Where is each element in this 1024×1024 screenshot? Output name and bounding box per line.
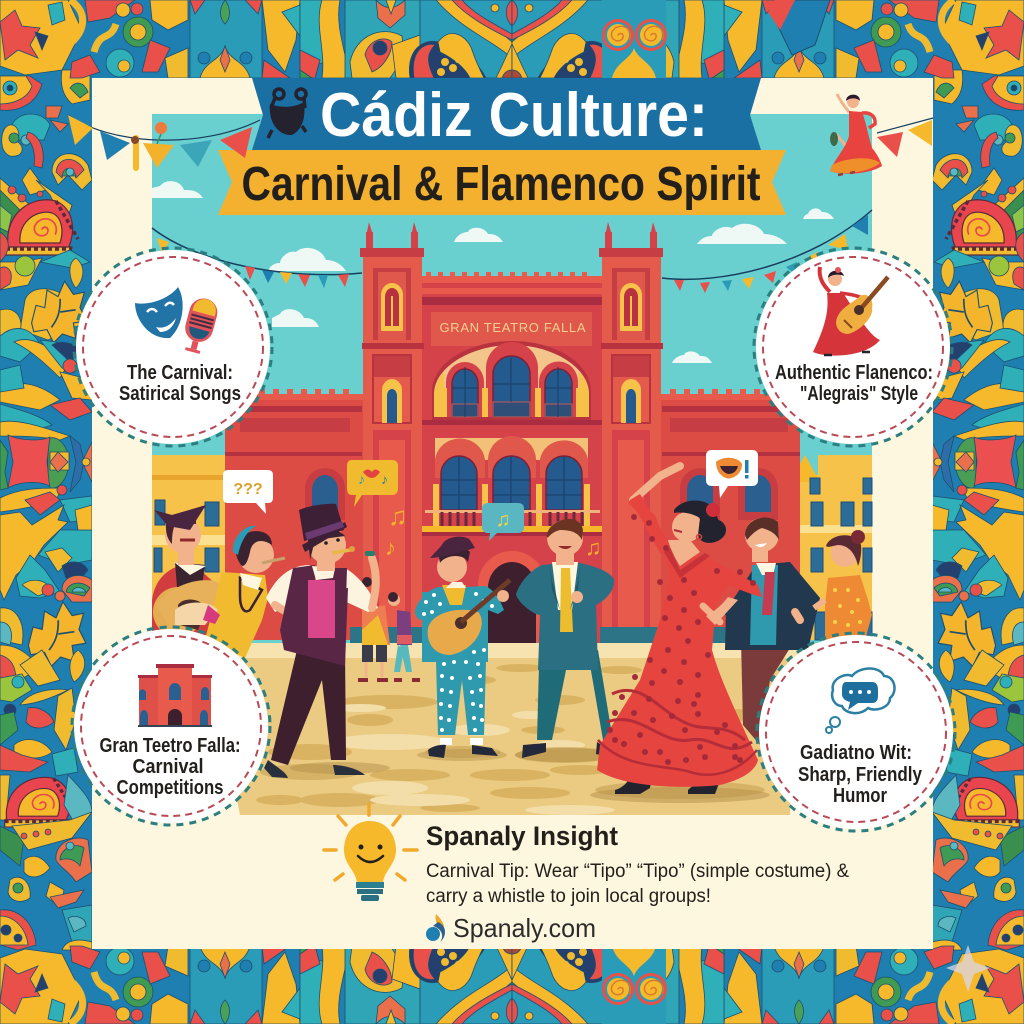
panel: The Carnival circle	[74, 248, 272, 446]
text block: Spanaly Insight: carry a whistle to join local groups!	[426, 886, 711, 907]
building: Gran Teatro Falla: GRAN TEATRO FALLA	[440, 320, 586, 335]
character: flamenco dancer	[590, 466, 770, 803]
title banner: yellow: Carnival & Flamenco Spirit	[242, 158, 761, 211]
label: Gadiatno Wit:	[800, 742, 912, 764]
side wings	[225, 400, 365, 640]
label	[798, 742, 923, 807]
illustration: carnival street scene	[68, 94, 933, 815]
label: Satirical Songs	[119, 383, 241, 405]
music notes	[385, 501, 602, 560]
bunting: right garland	[662, 210, 872, 293]
label: Authentic Flanenco:	[775, 362, 933, 384]
small background people	[358, 577, 420, 680]
building: Gran Teatro Falla	[225, 222, 800, 643]
icon: dancer and guitar	[813, 267, 888, 356]
music notes: ♪	[385, 535, 396, 560]
icon: smiling light bulb	[324, 804, 417, 901]
text block: Spanaly Insight	[426, 821, 849, 907]
door	[478, 551, 546, 643]
label	[100, 735, 240, 799]
character: dark suit man	[725, 518, 820, 745]
ground plaza	[152, 643, 872, 815]
label: Competitions	[116, 777, 224, 799]
speech bubble: heart and notes: ♪	[381, 471, 388, 487]
icon: small flamenco dancer top right	[830, 94, 882, 175]
bunting flag: red over banner	[220, 127, 252, 158]
speech bubble: heart and notes	[347, 460, 398, 507]
music notes: ♫	[388, 501, 408, 531]
label: Sharp, Friendly	[798, 764, 923, 786]
text block: Spanaly Insight: Spanaly Insight	[426, 821, 618, 851]
towers	[360, 222, 424, 643]
panel: Authentic Flamenco circle	[754, 248, 952, 446]
character: teal suit singer	[515, 519, 615, 762]
speech bubble: teal notes: ♫	[496, 509, 510, 531]
speech bubble: singing mouth	[706, 450, 758, 498]
plaque	[431, 312, 592, 346]
icon: masks and microphone	[135, 287, 221, 356]
speech bubble: question marks: ???	[233, 481, 263, 498]
speech bubble: question marks	[223, 470, 273, 514]
icon: theatre building	[138, 664, 212, 727]
music notes: ♫	[585, 535, 602, 560]
panel: cream poster	[92, 78, 933, 949]
logo: Spanaly.com: Spanaly.com	[453, 913, 596, 943]
character: guitarist in red	[152, 505, 222, 637]
label	[775, 362, 933, 405]
text block: Spanaly Insight: Carnival Tip: Wear “Tipo” “Tipo” (simple costume) &	[426, 861, 849, 882]
label: Carnival	[132, 756, 204, 778]
bunting: top left	[68, 115, 260, 171]
label: Gran Teetro Falla:	[100, 735, 240, 757]
bunting: top right	[877, 118, 933, 157]
speech bubble: teal notes	[482, 503, 524, 541]
label: Humor	[833, 785, 887, 807]
upper arcade	[432, 341, 591, 420]
title banner: blue: Cádiz Culture:	[320, 81, 708, 150]
label: "Alegrais" Style	[800, 383, 918, 405]
yellow side buildings	[152, 455, 872, 640]
plinths	[350, 627, 460, 643]
icon: thought bubble	[826, 668, 895, 733]
icon: theatre masks silhouette	[268, 89, 306, 138]
character: orange blouse woman	[814, 530, 872, 640]
label: The Carnival:	[127, 362, 233, 384]
clouds	[152, 181, 834, 363]
lower arcade	[435, 438, 588, 460]
character: polka dot guitarist	[415, 537, 510, 761]
sky	[152, 114, 872, 645]
character: top hat singer with whistle	[264, 504, 390, 778]
character: yellow jacket singer	[175, 526, 285, 658]
panel: Gran Teetro Falla circle	[72, 627, 270, 825]
label	[119, 362, 241, 405]
speech bubble: heart and notes: ♪	[358, 471, 365, 487]
center block	[421, 283, 603, 643]
panel: Gaditano Wit circle	[757, 633, 955, 831]
bunting: left garland	[152, 228, 362, 288]
